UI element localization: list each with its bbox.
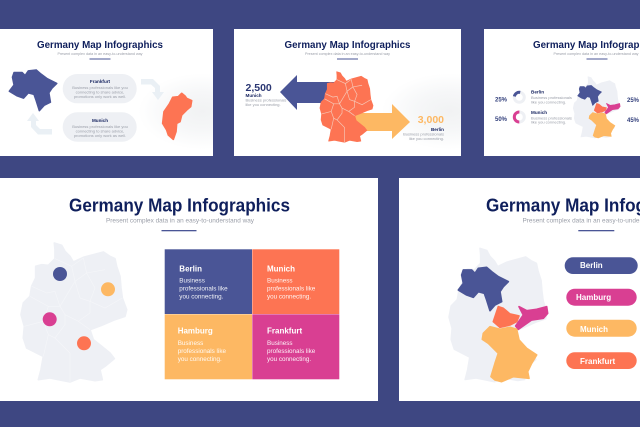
chart: berlin donut: [514, 92, 525, 103]
stat: 25 percent left: 25%: [495, 98, 508, 104]
callout: munich: Business professionals like you: [72, 124, 128, 129]
icon: yellow location dot: [101, 282, 115, 296]
callout: munich: [63, 112, 137, 142]
stat: berlin 3,000: Business professionals: [403, 132, 444, 136]
card: hamburg: professionals like: [178, 348, 226, 355]
card: berlin: professionals like: [179, 286, 228, 292]
label pill: munich: Munich: [580, 325, 608, 334]
card: berlin: Berlin: [179, 264, 202, 274]
text: munich: Munich: [531, 110, 547, 115]
icon: pink location dot: [43, 312, 57, 326]
icon: orange location dot: [77, 336, 91, 350]
card: hamburg: Hamburg: [178, 326, 213, 336]
heading: slide four title: Germany Map Infographics: [69, 196, 290, 216]
stat: munich 2,500: [246, 82, 286, 107]
text: munich: like you connecting.: [531, 120, 566, 125]
stat: berlin 3,000: [403, 114, 444, 141]
card: munich: Business: [267, 278, 293, 284]
arrow: hesse direction: [141, 79, 164, 100]
text: berlin: [531, 90, 572, 104]
stat: 25 percent right: 25%: [627, 98, 640, 104]
callout: munich: connecting to share advice,: [76, 128, 124, 134]
card: hamburg: you connecting.: [178, 356, 222, 363]
callout: frankfurt: Business professionals like you: [72, 85, 128, 90]
text: slide one subtitle: Present complex data in an easy-to-understand way: [58, 52, 143, 56]
map: germany with highlighted states, small: [573, 77, 620, 138]
card: hamburg: Business: [178, 340, 203, 347]
stat: munich 2,500: Business professionals: [246, 98, 286, 102]
text: slide two subtitle: Present complex data in an easy-to-understand way: [305, 52, 390, 56]
text: munich: Business professionals: [531, 115, 572, 120]
text: munich: [531, 110, 572, 125]
card: frankfurt: you connecting.: [267, 356, 311, 363]
stat: 50 percent left: 50%: [495, 117, 508, 123]
stat: 45 percent right: 45%: [627, 118, 640, 124]
text: slide four subtitle: Present complex data in an easy-to-understand way: [106, 218, 255, 224]
text: slide three subtitle: Present complex data in an easy-to-understand way: [554, 52, 639, 56]
card: munich: you connecting.: [267, 294, 311, 300]
stat: berlin 3,000: Berlin: [431, 127, 444, 132]
card: berlin: Business: [179, 278, 205, 284]
panel: percent donuts slide: [484, 29, 640, 156]
stat: berlin 3,000: like you connecting.: [409, 136, 444, 141]
card: berlin: [165, 249, 252, 314]
heading: slide one title: Germany Map Infographics: [37, 40, 163, 51]
heading: slide two title: Germany Map Infographics: [284, 40, 411, 51]
chart: munich donut: [514, 112, 524, 122]
arrow: blue left: [280, 75, 340, 110]
panel: highlighted states and pills slide: [399, 178, 640, 401]
callout: frankfurt: Frankfurt: [90, 79, 111, 84]
stat: munich 2,500: like you connecting.: [246, 102, 281, 107]
label pill: frankfurt: Frankfurt: [580, 357, 615, 366]
icon: blue location dot: [53, 267, 67, 281]
card: frankfurt: professionals like: [267, 348, 316, 355]
stat: berlin 3,000: 3,000: [418, 114, 444, 126]
card: berlin: you connecting.: [179, 294, 224, 300]
card: munich: Munich: [267, 264, 295, 274]
card: frankfurt: Frankfurt: [267, 326, 302, 336]
label pill: berlin: [565, 257, 638, 274]
card: hamburg: [165, 314, 252, 379]
label pill: frankfurt: [566, 352, 637, 369]
text: berlin: like you connecting.: [531, 99, 566, 104]
label pill: hamburg: [566, 289, 637, 306]
card: munich: professionals like: [267, 286, 316, 292]
label pill: hamburg: Hamburg: [576, 293, 611, 302]
panel: hesse and lower saxony flow slide: [0, 29, 213, 156]
map: hesse in orange: [163, 93, 192, 139]
card: frankfurt: Business: [267, 340, 293, 347]
callout: frankfurt: promotions only work as well.: [74, 94, 126, 99]
card: munich: [252, 249, 339, 314]
stat: munich 2,500: 2,500: [246, 82, 272, 94]
stat: munich 2,500: Munich: [246, 93, 262, 98]
map: germany gray with location dots: [21, 243, 127, 382]
callout: frankfurt: connecting to share advice,: [76, 90, 124, 94]
arrow: yellow right: [355, 104, 410, 139]
callout: munich: promotions only work as well.: [74, 133, 126, 138]
text: berlin: Berlin: [531, 90, 544, 94]
text: berlin: Business professionals: [531, 95, 572, 100]
map: germany in orange: [320, 72, 373, 142]
map: germany with highlighted states: [449, 248, 548, 382]
callout: frankfurt: [63, 74, 137, 103]
arrow: lower saxony direction: [27, 113, 52, 134]
callout: munich: Munich: [92, 118, 108, 123]
map: lower saxony in blue: [9, 70, 57, 111]
panel: map dots and color grid slide: [0, 178, 378, 401]
card: frankfurt: [252, 314, 339, 379]
label pill: berlin: Berlin: [580, 261, 603, 270]
panel: two arrows germany slide: [234, 29, 461, 156]
label pill: munich: [566, 320, 637, 337]
